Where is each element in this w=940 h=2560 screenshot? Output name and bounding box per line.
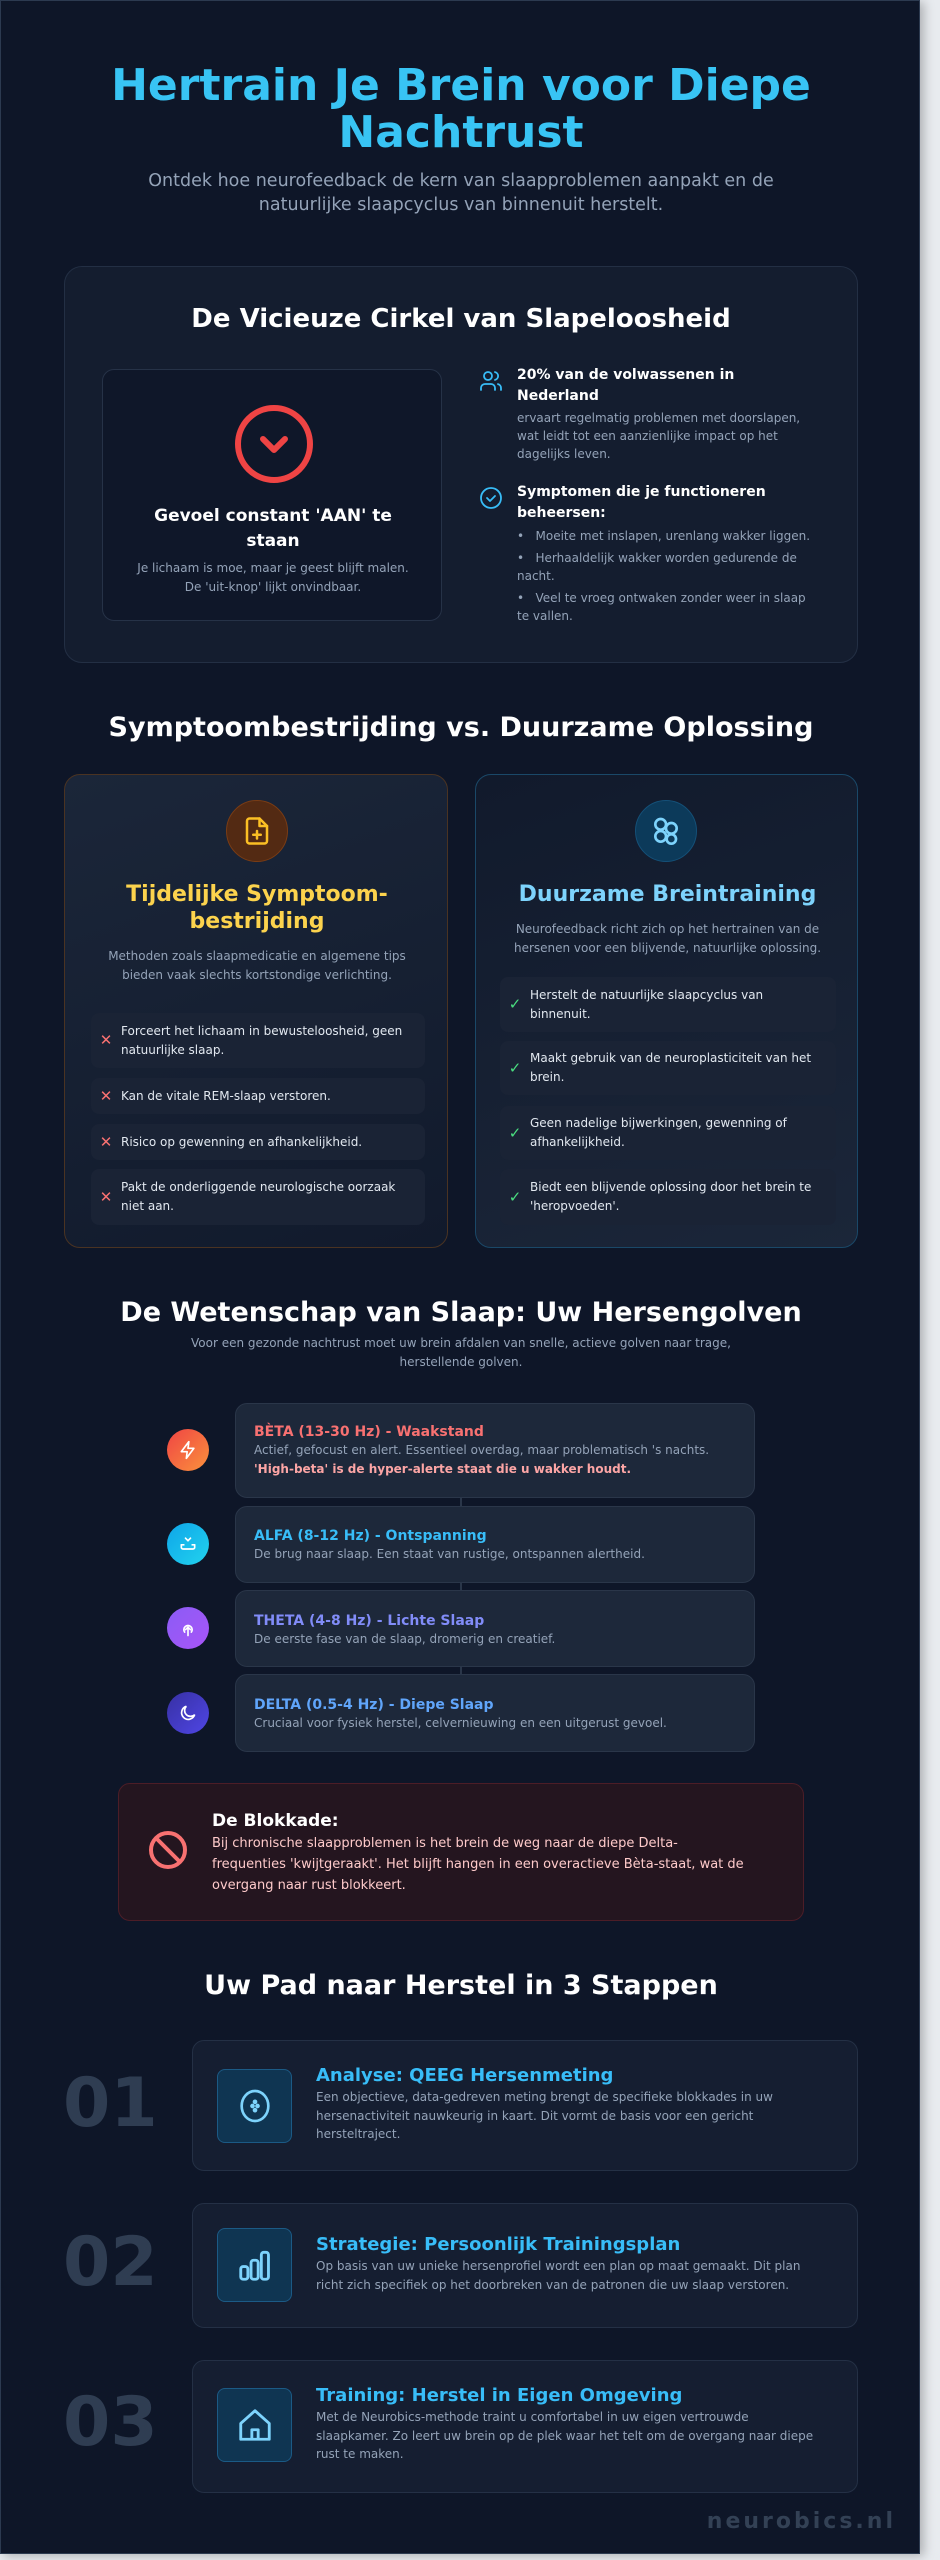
icon: brain circles [635,800,697,862]
wave: delta [235,1674,755,1752]
symptoms list: • Herhaaldelijk wakker worden gedurende de nacht. [517,551,797,583]
card text: Methoden zoals slaapmedicatie en algemene tips bieden vaak slechts kortstondige verlichting. [108,949,406,982]
list: negatives: ✕ [100,1086,112,1104]
symptoms list: • Veel te vroeg ontwaken zonder weer in slaap te vallen. [517,591,806,623]
card title: Gevoel constant 'AAN' te staan [154,506,392,551]
number 03: 03 [63,2383,158,2462]
stat: 20% [480,367,800,461]
step text 2: Op basis van uw unieke hersenprofiel wordt een plan op maat gemaakt. Dit plan richt zich specifiek op het doorbreken van de patronen die uw slaap verstoren. [316,2259,800,2292]
step text 1 [316,2065,773,2141]
step 2 [192,2203,858,2328]
list: positives: ✓ [509,995,521,1013]
heading: symptom vs solution: Symptoombestrijding vs. Duurzame Oplossing [109,712,813,743]
step 1 [192,2040,858,2171]
wave: delta: Cruciaal voor fysiek herstel, celvernieuwing en een uitgerust gevoel. [254,1716,667,1730]
callout: blokkade: frequenties 'kwijtgeraakt'. Het blijft hangen in een overactieve Bèta-staat, wat de overgang naar rust blokkeert. [212,1857,744,1893]
wave: theta: De eerste fase van de slaap, dromerig en creatief. [254,1632,555,1646]
number 01: 01 [63,2064,158,2143]
title: Hertrain Je Brein voor Diepe [111,60,811,111]
step text 3: slaapkamer. Zo leert uw brein op de plek waar het telt om de overgang naar diepe rust te maken. [316,2428,813,2461]
list: negatives [100,1024,425,1225]
step text 3 [316,2385,813,2461]
connector line [460,1496,462,1676]
wave: beta: Actief, gefocust en alert. Essentieel overdag, maar problematisch 's nachts. [254,1443,709,1457]
wave: theta: THETA (4-8 Hz) - Lichte Slaap [254,1613,484,1629]
list: negatives: Risico op gewenning en afhankelijkheid. [121,1134,362,1148]
title: Nachtrust [338,107,584,158]
card text: Je lichaam is moe, maar je geest blijft malen. De 'uit-knop' lijkt onvindbaar. [137,561,409,594]
step text 2 [316,2234,800,2292]
symptoms list [480,484,810,623]
list: negatives: ✕ [100,1188,112,1206]
title [111,60,811,158]
icon: home [217,2388,292,2462]
footer brand: neurobics.nl [707,2509,896,2534]
icon: users [480,371,502,391]
wave: beta: 'High-beta' is de hyper-alerte staat die u wakker houdt. [254,1462,631,1476]
icon: lightning [167,1429,209,1471]
card title [126,882,388,934]
card title: Tijdelijke Symptoom- [126,882,388,907]
panel: vicious circle [64,266,858,663]
list: positives [509,988,811,1213]
card text: Neurofeedback richt zich op het hertrainen van de hersenen voor een blijvende, natuurlijke oplossing. [514,922,821,955]
symptoms list: • Moeite met inslapen, urenlang wakker liggen. [517,529,810,543]
callout: blokkade: Bij chronische slaapproblemen is het brein de weg naar de diepe Delta- [212,1836,678,1851]
list: negatives: ✕ [100,1132,112,1150]
card title: bestrijding [190,909,324,934]
wave: beta [235,1403,755,1498]
wave: beta: BÈTA (13-30 Hz) - Waakstand [254,1424,484,1440]
wave: delta: DELTA (0.5-4 Hz) - Diepe Slaap [254,1697,494,1713]
panel: temporary symptom relief [64,774,448,1248]
icon: cloud [167,1607,209,1649]
icon: prohibited [149,1831,187,1869]
callout: blokkade [118,1783,804,1921]
subtitle: Ontdek hoe neurofeedback de kern van slaapproblemen aanpakt en de natuurlijke slaapcyclus van binnenuit herstelt. [148,171,774,215]
list: positives: ✓ [509,1124,521,1142]
step text 1: Een objectieve, data-gedreven meting brengt de specifieke blokkades in uw hersenactiviteit nauwkeurig in kaart. Dit vormt de basis voor een gericht hersteltraject. [316,2090,773,2141]
list: positives: Biedt een blijvende oplossing door het brein te 'heropvoeden'. [530,1180,811,1213]
heading: vicious circle: De Vicieuze Cirkel van Slapeloosheid [191,304,731,334]
list: positives: ✓ [509,1188,521,1206]
icon: chart [217,2228,292,2302]
icon: red circle chevron [235,405,313,483]
list: negatives: Forceert het lichaam in bewusteloosheid, geen natuurlijke slaap. [121,1024,402,1056]
stat: 20%: ervaart regelmatig problemen met doorslapen, wat leidt tot een aanzienlijke impact op het dagelijks leven. [517,411,800,461]
wave: alpha: De brug naar slaap. Een staat van rustige, ontspannen alertheid. [254,1547,645,1561]
step text 1: Analyse: QEEG Hersenmeting [316,2065,613,2086]
callout: blokkade: De Blokkade: [212,1811,339,1831]
stat: 20%: 20% van de volwassenen in Nederland [517,367,734,404]
step text 2: Strategie: Persoonlijk Trainingsplan [316,2234,680,2255]
list: negatives: Pakt de onderliggende neurologische oorzaak niet aan. [121,1180,395,1213]
list: negatives: ✕ [100,1031,112,1049]
icon: relax [167,1523,209,1565]
heading: science of sleep: De Wetenschap van Slaap: Uw Hersengolven [120,1297,802,1328]
list: positives: ✓ [509,1058,521,1076]
list: negatives: Kan de vitale REM-slaap verstoren. [121,1088,331,1102]
icon: file plus [226,800,288,862]
card: constant on [102,369,442,621]
heading: path to recovery: Uw Pad naar Herstel in 3 Stappen [204,1970,718,2001]
panel: durable brain training [475,774,858,1248]
list: positives: Herstelt de natuurlijke slaapcyclus van binnenuit. [530,988,763,1020]
step 3 [192,2360,858,2493]
step text 3: Met de Neurobics-methode traint u comfortabel in uw eigen vertrouwde [316,2410,749,2424]
number 02: 02 [63,2223,158,2302]
wave: theta [235,1590,755,1667]
icon: qeeg [217,2069,292,2143]
icon: moon [167,1692,209,1734]
science subtitle: Voor een gezonde nachtrust moet uw brein afdalen van snelle, actieve golven naar trage, herstellende golven. [191,1336,731,1369]
wave: alpha: ALFA (8-12 Hz) - Ontspanning [254,1528,487,1544]
icon: check circle [480,487,502,509]
symptoms list: Symptomen die je functioneren beheersen: [517,484,766,521]
card title: Duurzame Breintraining [519,882,816,907]
list: positives: Maakt gebruik van de neuroplasticiteit van het brein. [530,1051,811,1084]
list: positives: Geen nadelige bijwerkingen, gewenning of afhankelijkheid. [530,1116,787,1149]
step text 3: Training: Herstel in Eigen Omgeving [316,2385,682,2406]
wave: alpha [235,1506,755,1583]
